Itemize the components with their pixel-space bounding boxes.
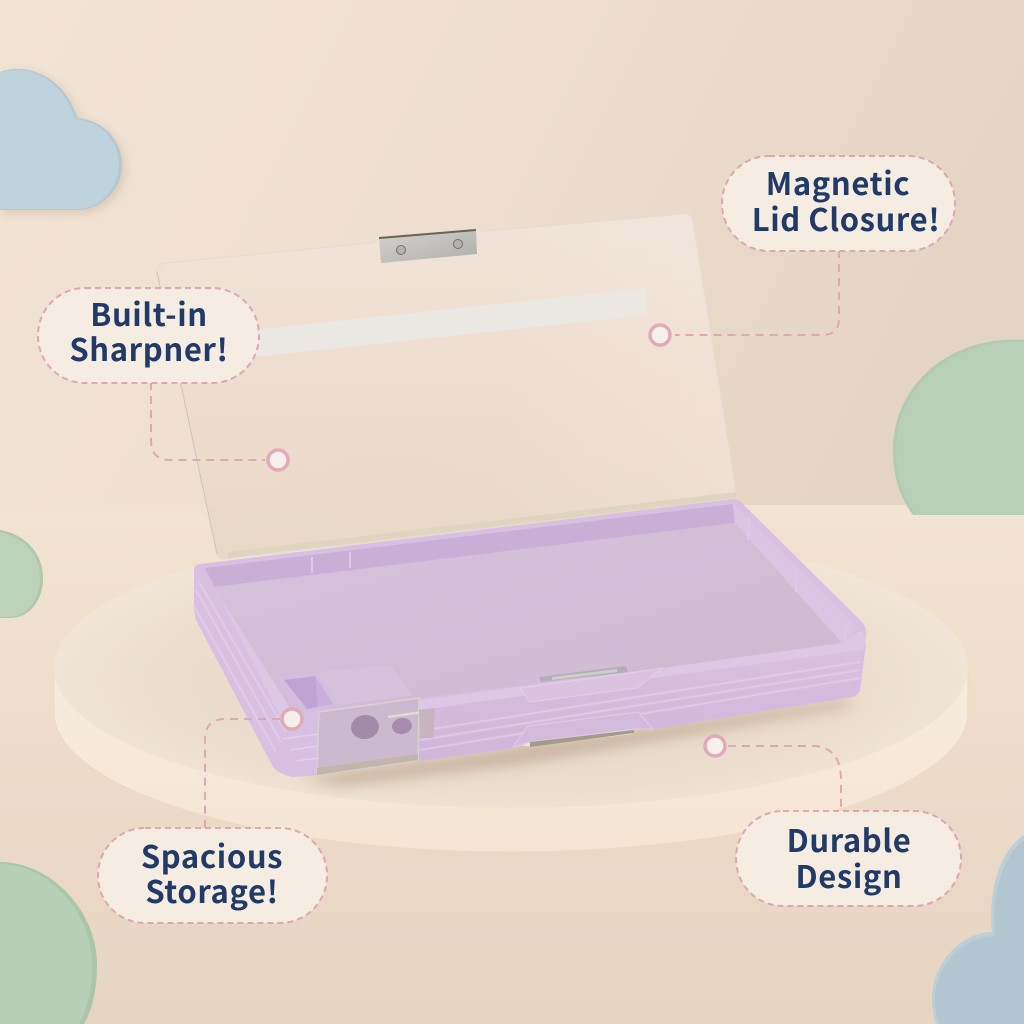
right tray wall [733,504,858,643]
metal clasp [379,229,477,263]
callout: spacious storage: Storage! [145,867,279,912]
lid label strip [243,288,647,358]
lower metal strip [522,730,634,747]
icon: green cloud bottom left [0,862,97,1024]
background wall [0,0,1024,510]
pencil box [157,214,866,777]
inner tray floor [214,523,842,713]
icon: green semicircle right [893,340,1024,515]
callout: built-in sharpner [38,288,288,470]
callout: built-in sharpner: Built-in [90,290,208,335]
front notch bottom [513,712,653,747]
icon: blue cloud top left [0,69,125,213]
front face with ridges [283,630,866,761]
callout: spacious storage [98,709,327,923]
callout: durable design [705,736,961,906]
callout: magnetic lid closure: Lid Closure! [752,195,940,240]
callout: durable design: Durable [787,816,911,861]
box shadow on platform [300,698,855,786]
far tray wall [205,504,735,587]
wall ticks [312,518,846,640]
background floor [0,505,1024,1024]
round platform [54,528,968,852]
box outer body [194,499,866,777]
callout: built-in sharpner: Sharpner! [69,325,229,370]
callout: magnetic lid closure [650,156,955,345]
left tray wall [205,568,293,722]
callout: magnetic lid closure: Magnetic [766,159,910,204]
callout: spacious storage: Spacious [141,832,283,877]
inner metal strip [539,666,628,682]
lid [157,214,736,559]
icon: blue cloud bottom right [932,835,1024,1024]
sharpener compartment [278,665,435,775]
icon: green bump left [0,530,43,618]
left side ridges [194,582,286,752]
front notch top [520,668,662,702]
callout: durable design: Design [796,852,902,897]
